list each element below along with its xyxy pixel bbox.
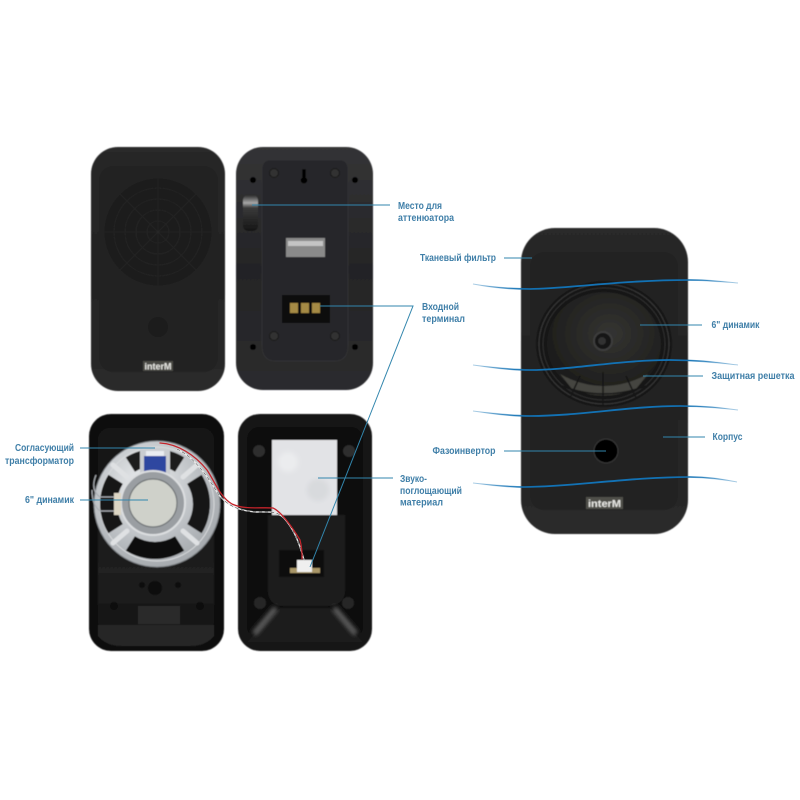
speaker: front with grille: interM <box>144 362 172 372</box>
label: attenuator place: аттенюатора <box>398 213 454 224</box>
label: attenuator place <box>398 201 454 224</box>
speaker: open front with driver <box>89 414 224 651</box>
label: 6 inch driver right: 6" динамик <box>712 320 760 331</box>
speaker: front with exposed driver <box>521 228 688 534</box>
label: matching transformer <box>5 443 74 467</box>
label: fabric filter: Тканевый фильтр <box>420 252 496 264</box>
foam <box>272 440 337 515</box>
label: input terminal: Входной <box>422 302 459 313</box>
label: sound absorbing material: материал <box>400 498 443 508</box>
label: matching transformer: трансформатор <box>5 455 74 467</box>
label: matching transformer: Согласующий <box>15 443 74 454</box>
woofer <box>536 281 672 407</box>
logo <box>586 497 623 509</box>
speaker: front with exposed driver: interM <box>588 498 621 510</box>
speaker: rear with terminal <box>236 147 373 390</box>
wave lines <box>473 280 738 487</box>
speaker: front with grille <box>91 147 225 391</box>
label: 6 inch driver left: 6" динамик <box>25 495 75 506</box>
label: sound absorbing material: Звуко- <box>400 474 427 485</box>
label: enclosure: Корпус <box>712 432 743 443</box>
label: attenuator place: Место для <box>398 201 442 212</box>
wires <box>160 443 304 560</box>
speaker: open rear with foam <box>238 414 372 651</box>
label: bass reflex: Фазоинвертор <box>432 446 496 457</box>
driver frame <box>92 441 220 567</box>
bass port <box>594 439 618 463</box>
label: sound absorbing material: поглощающий <box>400 486 462 497</box>
leader lines <box>80 205 705 567</box>
label: input terminal <box>422 302 465 325</box>
label: input terminal: терминал <box>422 314 465 325</box>
label: sound absorbing material <box>400 474 462 508</box>
